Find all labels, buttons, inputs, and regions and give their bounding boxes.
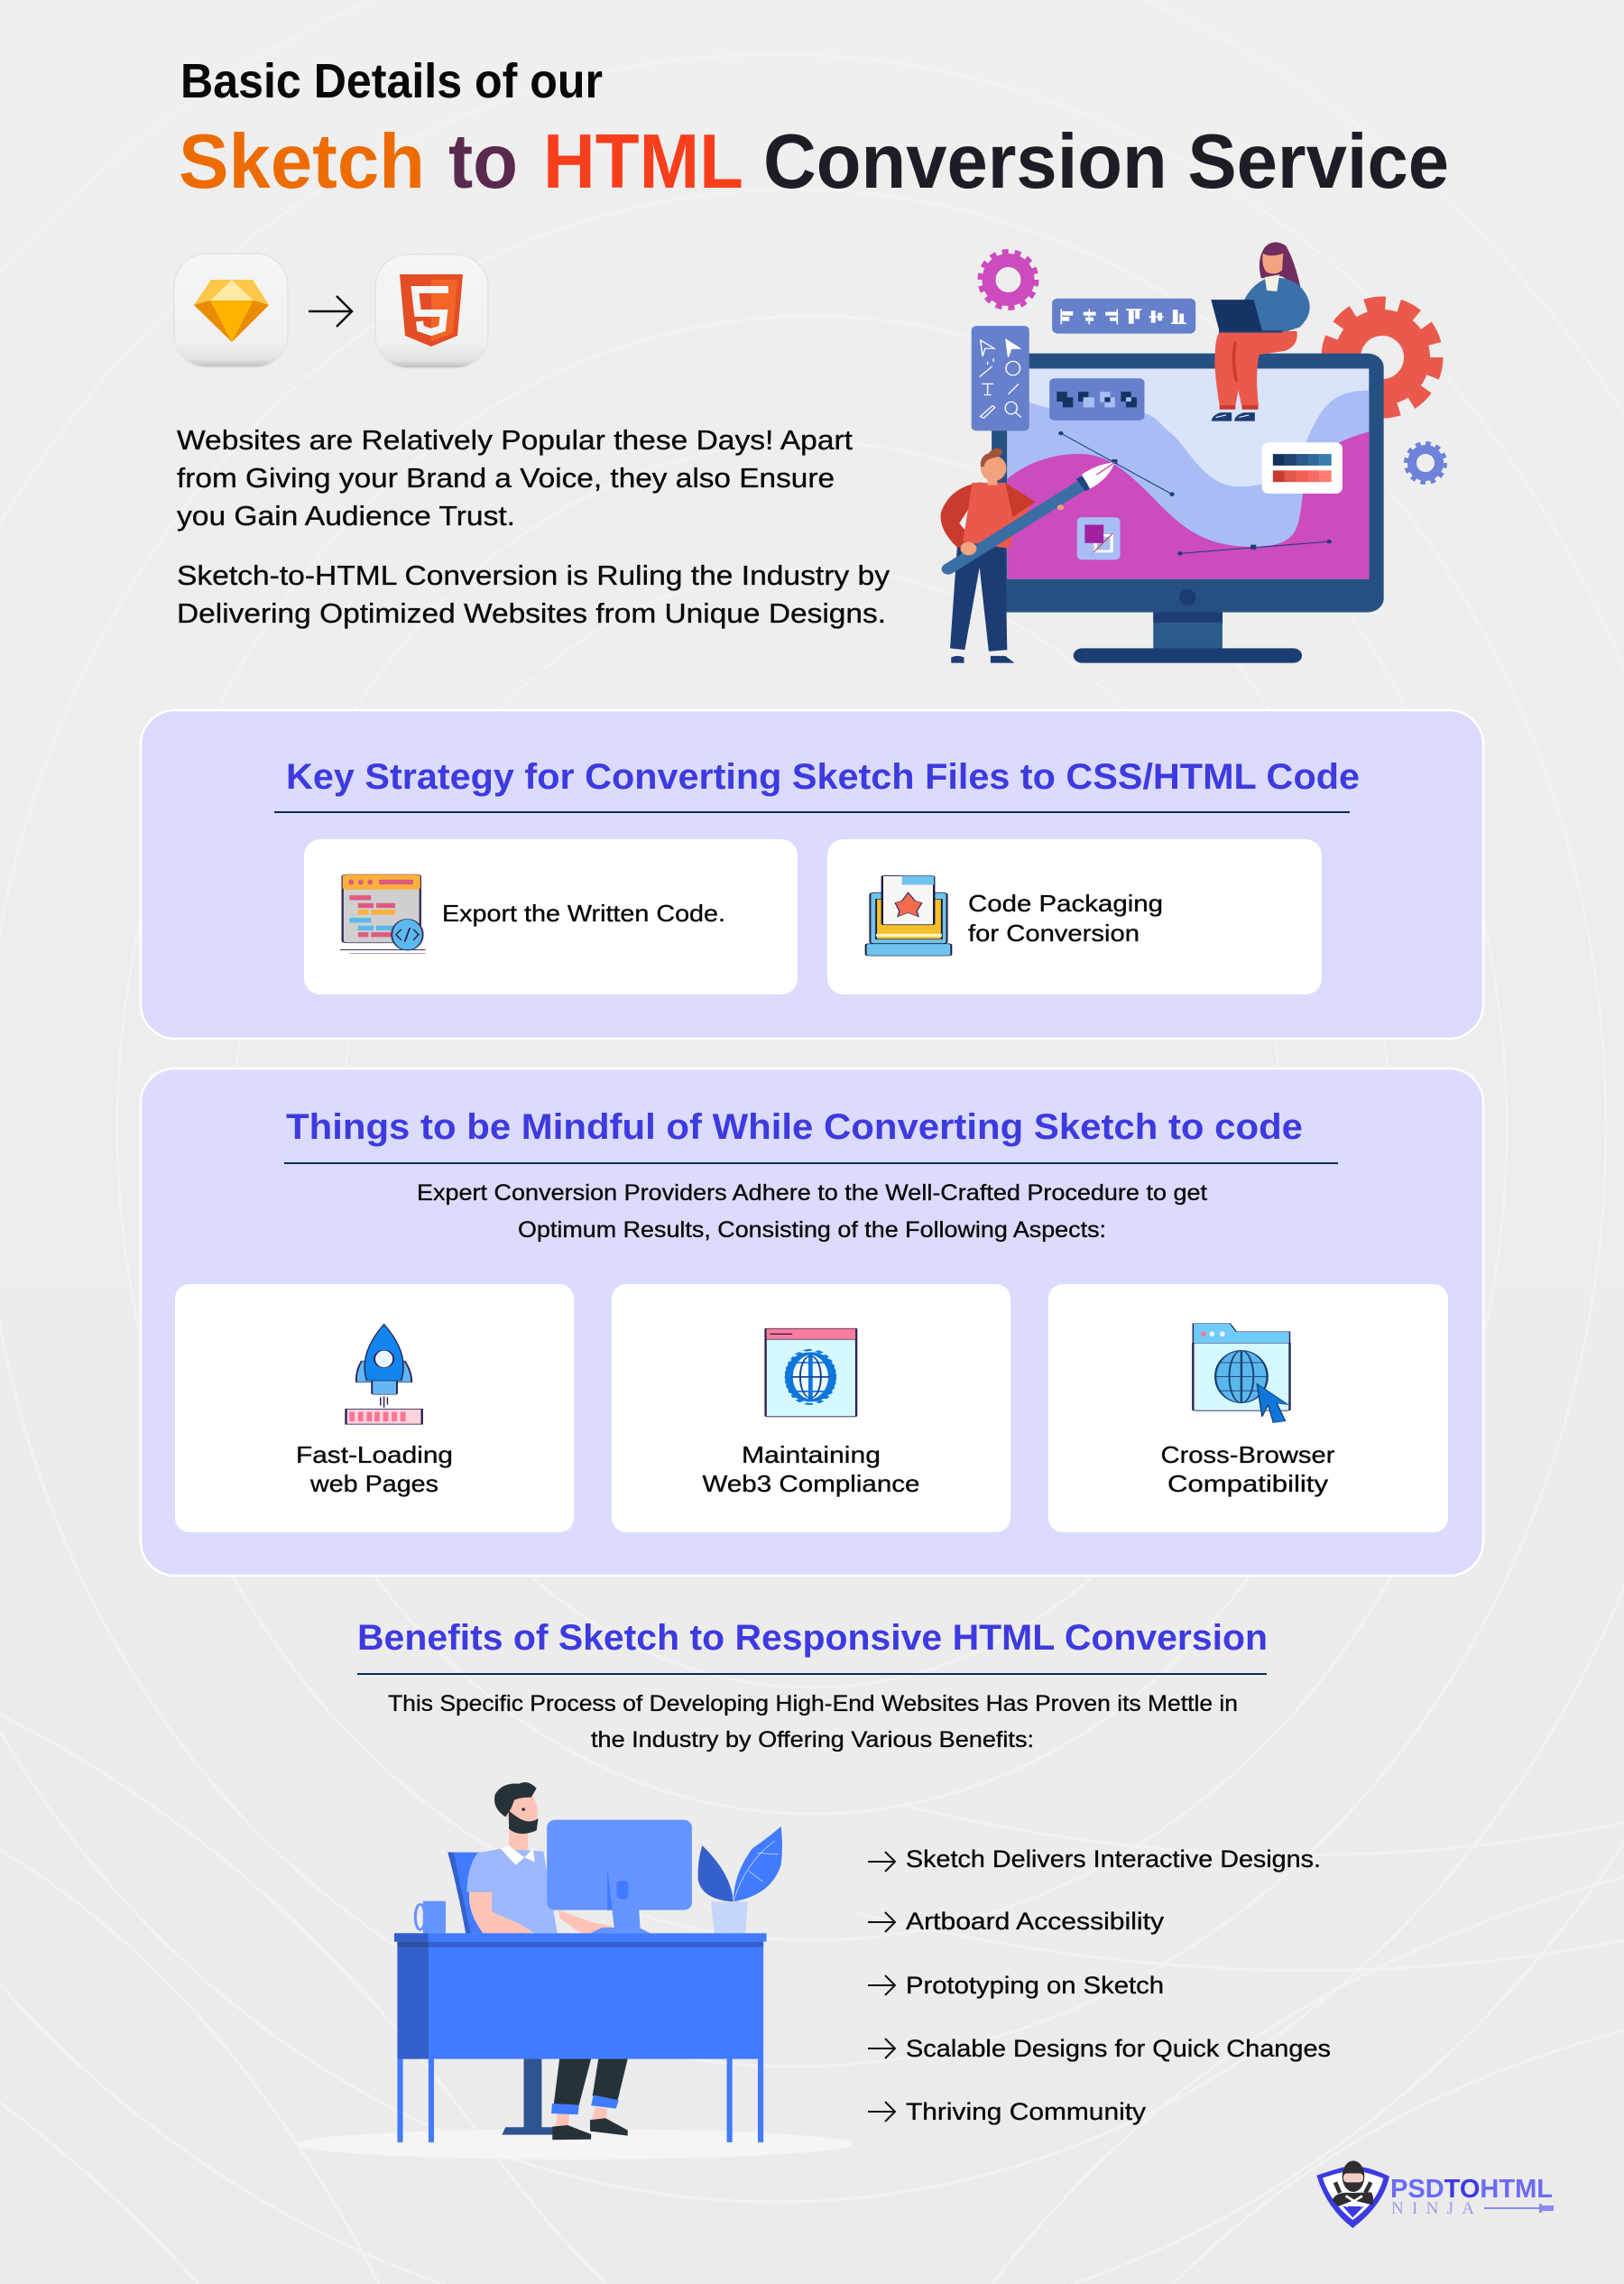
intro text: Expert Conversion Providers Adhere to the Well-Crafted Procedure to get xyxy=(417,1180,1207,1206)
icon: red gear xyxy=(1329,304,1435,411)
title word: to: to xyxy=(448,119,518,205)
icon: code window xyxy=(340,874,426,954)
woman with laptop xyxy=(1211,242,1310,421)
card text line two: Web3 Compliance xyxy=(702,1470,920,1497)
heading: mindful: Things to be Mindful of While Converting Sketch to code xyxy=(286,1107,1303,1147)
man holding pen xyxy=(941,448,1115,663)
list item four: Scalable Designs for Quick Changes xyxy=(906,2035,1331,2062)
card text line two: web Pages xyxy=(309,1470,438,1497)
list item five: Thriving Community xyxy=(906,2098,1147,2125)
monitor stand xyxy=(1074,610,1302,663)
align toolbar xyxy=(1052,299,1195,334)
man legs xyxy=(551,2057,628,2140)
card text line two: for Conversion xyxy=(968,920,1140,947)
intro text: Optimum Results, Consisting of the Following Aspects: xyxy=(518,1217,1106,1243)
title words: Conversion Service: Conversion Service xyxy=(763,119,1449,205)
fill and stroke swatch xyxy=(1077,517,1121,559)
intro paragraph two: Delivering Optimized Websites from Unique Designs. xyxy=(177,597,886,629)
icon: ninja shield xyxy=(1316,2160,1389,2228)
card text: Export the Written Code. xyxy=(442,900,725,927)
icon: web window with globe gear xyxy=(766,1328,856,1417)
monitor body xyxy=(992,354,1384,613)
monitor and figures xyxy=(941,242,1384,663)
illustration: man at desk xyxy=(296,1782,852,2159)
logo xyxy=(1316,2160,1554,2228)
benefits intro text xyxy=(388,1691,1238,1752)
card text: Cross-Browser xyxy=(1160,1441,1335,1468)
intro paragraph one: Websites are Relatively Popular these Days! Apart xyxy=(177,424,853,456)
icon: laptop with package xyxy=(866,875,951,956)
illustration: designers at monitor xyxy=(941,242,1445,663)
icon: HTML5 tile xyxy=(375,254,488,368)
card: fast-loading xyxy=(175,1284,574,1532)
desk legs and post xyxy=(397,2057,763,2142)
title xyxy=(179,54,1449,205)
design curves xyxy=(1059,431,1331,555)
chair xyxy=(448,1853,492,1933)
intro paragraph one: you Gain Audience Trust. xyxy=(177,500,515,532)
logo wordmark: PSDTOHTML xyxy=(1390,2175,1553,2204)
colour palette card xyxy=(1262,442,1343,494)
intro paragraph one xyxy=(177,424,853,532)
tools panel xyxy=(972,326,1029,430)
heading rule xyxy=(284,1162,1338,1164)
benefits intro text: the Industry by Offering Various Benefits: xyxy=(591,1727,1034,1752)
card: code packaging xyxy=(827,839,1322,994)
heading: key strategy: Key Strategy for Converting Sketch Files to CSS/HTML Code xyxy=(286,757,1360,797)
title word: Sketch: Sketch xyxy=(179,119,425,205)
heading rule xyxy=(274,811,1350,813)
mug xyxy=(415,1901,446,1933)
man upper body xyxy=(466,1782,613,1933)
logo subtitle: NINJA xyxy=(1391,2199,1474,2218)
panel: key strategy xyxy=(141,710,1483,1039)
intro text xyxy=(417,1180,1207,1243)
heading: benefits: Benefits of Sketch to Responsive HTML Conversion xyxy=(357,1618,1268,1658)
benefits intro text: This Specific Process of Developing High-End Websites Has Proven its Mettle in xyxy=(388,1691,1238,1716)
list item one: Sketch Delivers Interactive Designs. xyxy=(906,1845,1321,1873)
icon: Sketch app tile xyxy=(174,254,288,367)
icon: blue gear xyxy=(1406,444,1445,482)
card: cross-browser xyxy=(1048,1284,1448,1532)
card: export code xyxy=(304,839,798,994)
plant xyxy=(698,1826,782,1933)
card text line two: Compatibility xyxy=(1167,1470,1328,1497)
arrow: Sketch to HTML xyxy=(309,296,352,327)
icon: purple gear xyxy=(980,252,1036,308)
intro paragraph one: from Giving your Brand a Voice, they also Ensure xyxy=(177,462,835,494)
card text: Fast-Loading xyxy=(296,1441,453,1468)
intro paragraph two: Sketch-to-HTML Conversion is Ruling the Industry by xyxy=(177,559,890,591)
benefits list xyxy=(868,1845,1331,2125)
desk scene xyxy=(394,1782,782,2142)
icon: browser folder with globe and cursor xyxy=(1193,1324,1290,1422)
panel: things to be mindful of xyxy=(141,1068,1483,1576)
ground shadow xyxy=(296,2129,852,2159)
intro paragraph two xyxy=(177,559,890,629)
title line one: Basic Details of our xyxy=(180,54,603,108)
layers panel xyxy=(1049,378,1144,421)
desk xyxy=(394,1933,767,2059)
list item two: Artboard Accessibility xyxy=(906,1908,1165,1935)
card text: Code Packaging xyxy=(968,890,1163,917)
icon: rocket xyxy=(346,1324,422,1424)
title word: HTML: HTML xyxy=(543,119,743,205)
computer monitor xyxy=(547,1820,692,1933)
icon: sword xyxy=(1484,2204,1554,2213)
card: web3 compliance xyxy=(612,1284,1010,1532)
list item three: Prototyping on Sketch xyxy=(906,1972,1164,1999)
card text: Maintaining xyxy=(742,1441,881,1468)
heading rule: benefits xyxy=(357,1673,1267,1675)
